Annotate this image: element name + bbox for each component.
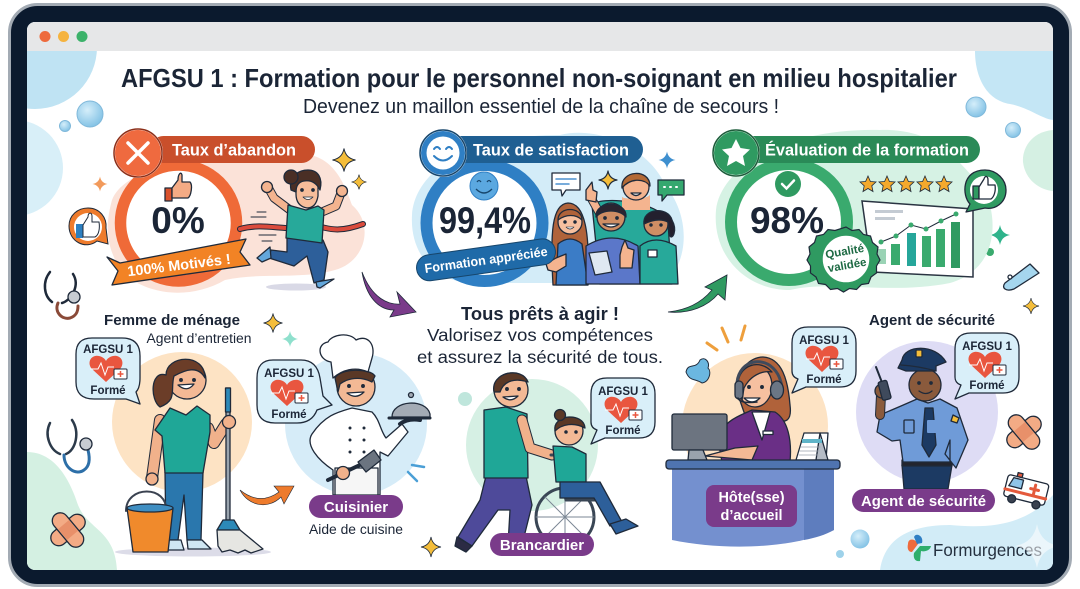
heading: taux de satisfaction: Taux de satisfaction <box>473 142 629 160</box>
ambulance icon <box>1002 470 1050 511</box>
decoration: blue blob <box>686 359 710 383</box>
stethoscope icon bottom <box>48 420 92 472</box>
speech bubble: afgsu formé: AFGSU 1 <box>799 335 850 347</box>
speech bubble: afgsu formé: AFGSU 1 <box>598 386 649 398</box>
icon: vial <box>1004 264 1039 290</box>
icon: star badge <box>713 130 759 176</box>
subtitle: Devenez un maillon essentiel de la chaîne de secours ! <box>303 96 779 118</box>
gauge ring <box>731 164 847 280</box>
icon: thumb up <box>165 173 191 201</box>
stethoscope icon top <box>45 272 80 318</box>
gauge ring <box>120 165 236 281</box>
speech bubble: afgsu formé: AFGSU 1 <box>264 368 315 380</box>
person: hôte d'accueil <box>666 326 856 547</box>
central message: Tous prêts à agir ! <box>461 304 619 324</box>
label box: hôte(sse) d'accueil: d’accueil <box>720 508 783 524</box>
decorative bubbles <box>60 97 1020 558</box>
badge: formation appréciée: Formation appréciée <box>424 244 548 276</box>
speech bubble: afgsu formé <box>792 327 856 393</box>
panel: évaluation de la formation <box>713 130 1006 292</box>
person: brancardier <box>455 373 655 556</box>
sub-label: agent d'entretien: Agent d’entretien <box>146 331 252 346</box>
logo: formurgences: Formurgences <box>933 540 1042 560</box>
seal: qualité validée <box>807 227 880 292</box>
value 0%: 0% <box>151 200 205 241</box>
sub-label: aide de cuisine: Aide de cuisine <box>309 522 403 537</box>
speech bubble: afgsu formé: Formé <box>806 374 842 386</box>
icon: thumb speech bubble <box>69 208 108 245</box>
label pill: cuisinier: Cuisinier <box>324 499 388 516</box>
speech bubble: afgsu formé <box>76 338 140 404</box>
central message: Valorisez vos compétences <box>427 325 653 345</box>
person: femme de ménage <box>76 312 271 556</box>
badge: formation appréciée <box>415 237 557 282</box>
browser title bar <box>27 22 1053 51</box>
speech bubble: afgsu formé <box>257 360 332 423</box>
speech bubble: afgsu formé: Formé <box>90 385 126 397</box>
illustration: cleaner with mop and bucket <box>115 359 271 556</box>
speech bubble: afgsu formé <box>591 378 655 444</box>
heading: taux d'abandon: Taux d’abandon <box>172 142 296 160</box>
panel: taux d'abandon <box>69 129 365 293</box>
label pill: brancardier: Brancardier <box>500 537 584 554</box>
speech bubble: afgsu formé: AFGSU 1 <box>83 344 134 356</box>
person: cuisinier <box>257 335 430 537</box>
decoration: orange ticks <box>707 326 745 350</box>
illustration: happy team <box>546 171 684 285</box>
speech bubble: afgsu formé: AFGSU 1 <box>962 341 1013 353</box>
heading: femme de ménage: Femme de ménage <box>104 312 240 329</box>
heading: évaluation de la formation: Évaluation de la formation <box>765 140 969 160</box>
arrow: purple to centre <box>362 272 416 317</box>
label box: hôte(sse) d'accueil: Hôte(sse) <box>718 490 785 506</box>
five star rating <box>860 176 952 192</box>
value 99,4%: 99,4% <box>439 200 531 241</box>
logo: formurgences <box>908 535 1042 561</box>
illustration: chef with cloche <box>310 335 430 495</box>
label pill: cuisinier <box>309 495 403 518</box>
decorative sparkles <box>92 148 1039 557</box>
decoration: white sparkle <box>1015 524 1059 568</box>
heading: agent de sécurité: Agent de sécurité <box>869 312 995 329</box>
icon: smile <box>470 172 498 200</box>
seal: qualité validée: Qualité <box>825 243 865 261</box>
label pill: brancardier <box>490 533 594 556</box>
arrow: orange to cook <box>240 486 294 505</box>
central message <box>417 304 663 367</box>
speech bubble: afgsu formé: Formé <box>969 380 1005 392</box>
arrow: green to evaluation <box>668 275 727 312</box>
icon: cross <box>114 129 162 177</box>
gauge ring <box>426 165 542 281</box>
person: agent de sécurité <box>852 312 1019 512</box>
icon: green thumb speech <box>965 170 1006 212</box>
seal: qualité validée: validée <box>827 257 867 275</box>
bandage icon left <box>40 502 96 558</box>
label box: hôte(sse) d'accueil <box>706 485 797 527</box>
speech bubble: afgsu formé: Formé <box>605 425 641 437</box>
panel: taux de satisfaction <box>412 130 684 285</box>
ribbon: 100% motivés <box>107 239 250 285</box>
header pill <box>440 136 643 163</box>
value 98%: 98% <box>750 200 824 241</box>
label pill: agent de sécurité <box>852 489 995 512</box>
header pill <box>150 136 315 163</box>
illustration: porter pushing wheelchair <box>455 373 638 552</box>
header pill <box>740 136 980 163</box>
speech bubble: afgsu formé: Formé <box>271 409 307 421</box>
chart screen <box>862 201 973 277</box>
icon: check <box>775 171 801 197</box>
decoration: blue ticks <box>408 465 424 481</box>
title: AFGSU 1 : Formation pour le personnel non-soignant en milieu hospitalier <box>121 63 957 93</box>
central message: et assurez la sécurité de tous. <box>417 347 663 367</box>
speech bubble: afgsu formé <box>955 333 1019 399</box>
ribbon: 100% motivés: 100% Motivés ! <box>127 252 232 280</box>
icon: smile badge <box>420 130 466 176</box>
illustration: runner crossing finish line <box>240 170 363 290</box>
label pill: agent de sécurité: Agent de sécurité <box>861 493 986 510</box>
bandage icon right <box>996 404 1052 460</box>
illustration: receptionist at desk <box>666 357 840 547</box>
illustration: security guard <box>875 348 968 489</box>
